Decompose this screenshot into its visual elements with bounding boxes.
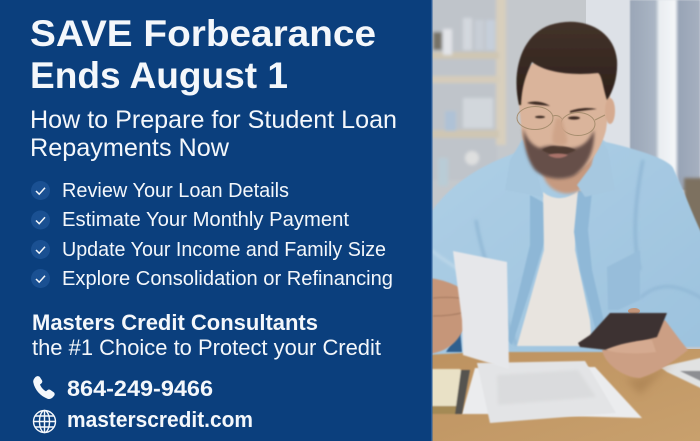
panel: blue text panel	[0, 0, 431, 441]
neck	[542, 155, 594, 196]
item: update income and family size: Update Your Income and Family Size	[62, 239, 386, 261]
company name: Masters Credit Consultants	[32, 310, 318, 335]
ear	[605, 98, 615, 124]
website: masterscredit.com	[67, 407, 253, 432]
chair back	[684, 178, 700, 238]
table shadow	[630, 365, 672, 392]
item: estimate monthly payment: Estimate Your Monthly Payment	[62, 209, 349, 231]
window wall	[586, 0, 700, 192]
item: explore consolidation or refinancing: Explore Consolidation or Refinancing	[62, 268, 393, 290]
shirt shading	[431, 160, 700, 345]
notebook	[432, 368, 471, 415]
placket right	[574, 190, 606, 335]
thumb behind calculator	[628, 308, 640, 314]
lips	[548, 154, 568, 158]
curtains	[630, 0, 700, 190]
subtitle: How to Prepare for Student Loan	[30, 106, 397, 134]
nose	[552, 118, 567, 145]
table	[431, 349, 700, 441]
white t-shirt	[517, 186, 592, 346]
paper text block	[499, 372, 592, 402]
subtitle: Repayments Now	[30, 134, 230, 162]
item: review loan details: Review Your Loan Details	[62, 180, 289, 202]
icon: phone	[33, 376, 55, 399]
head	[518, 63, 611, 170]
dark shirt under left arm	[446, 330, 462, 352]
right hand	[602, 320, 688, 378]
shelf unit	[425, 0, 506, 186]
phone number: 864-249-9466	[67, 376, 213, 401]
laptop	[660, 357, 700, 390]
shirt torso and sleeves	[425, 138, 700, 355]
photo: man reviewing paperwork with a calculator	[425, 0, 700, 441]
wall background	[432, 0, 700, 349]
title: Ends August 1	[30, 55, 288, 96]
hair	[516, 22, 617, 105]
beard	[523, 128, 594, 179]
shirt pocket	[608, 254, 640, 310]
mustache and mouth	[542, 146, 576, 155]
fingers under calculator	[605, 340, 656, 353]
panel edge	[431, 0, 432, 441]
glasses	[517, 106, 605, 136]
title: SAVE Forbearance	[30, 13, 376, 54]
title	[30, 13, 376, 96]
tagline: the #1 Choice to Protect your Credit	[32, 335, 381, 360]
left hand	[432, 278, 464, 354]
icon: globe	[34, 410, 56, 432]
collar	[514, 141, 596, 197]
shirt placket left	[508, 196, 544, 344]
subtitle	[30, 106, 397, 162]
back paper sheet	[462, 367, 642, 418]
front paper sheet	[476, 360, 590, 424]
eyebrows and eyes	[527, 102, 597, 120]
checklist	[31, 180, 393, 290]
held paper	[453, 251, 509, 369]
finger lines	[433, 296, 461, 317]
calculator	[578, 313, 667, 350]
